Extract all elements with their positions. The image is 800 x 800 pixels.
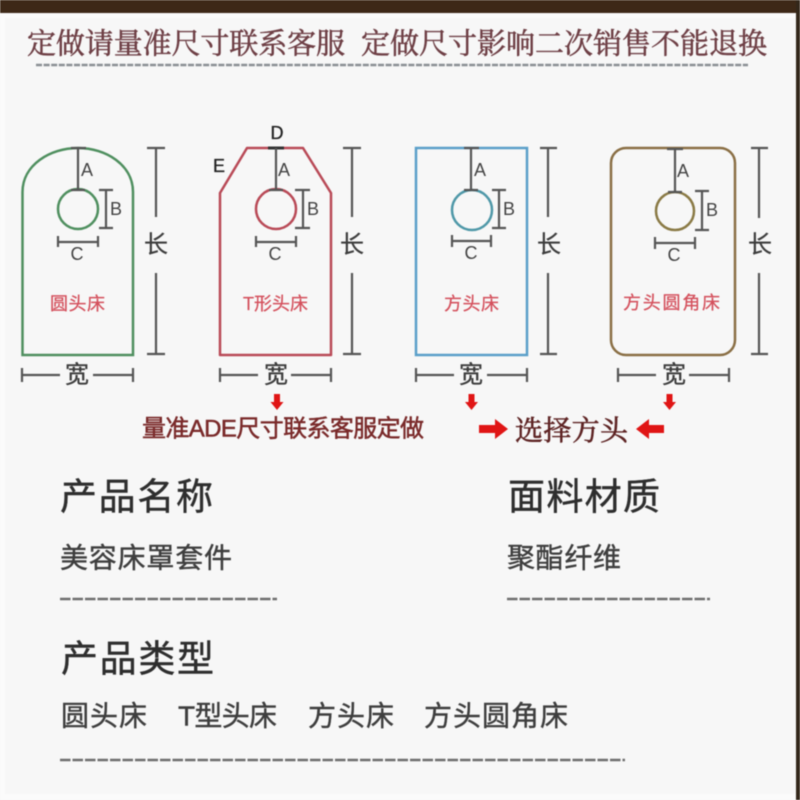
value: material: 聚酯纤维 [507, 542, 621, 574]
arrow: down under square bed [465, 394, 478, 410]
bed outline: T shape [220, 148, 331, 355]
bed label: T形头床 [243, 294, 308, 314]
dimension A: A [278, 160, 290, 180]
width dimension [618, 362, 729, 388]
value: product name: 美容床罩套件 [60, 542, 232, 574]
dimension A: A [474, 160, 486, 180]
value: product types: T型头床 [178, 700, 277, 732]
diagram: square head rounded corner bed [611, 148, 772, 388]
diagram: square head bed [416, 148, 561, 388]
length dimension: 长 [537, 232, 561, 258]
length dimension [748, 148, 772, 354]
dimension A: A [81, 160, 93, 180]
bed label: 方头床 [444, 294, 499, 314]
value: product types [61, 700, 568, 732]
length dimension [144, 148, 168, 354]
dimension D: D [270, 123, 284, 143]
dimension B [695, 191, 718, 230]
dimension B: B [706, 200, 718, 220]
hole circle [656, 192, 694, 230]
length dimension [340, 148, 364, 354]
dimension D [268, 123, 284, 148]
dimension B: B [503, 199, 515, 219]
bed outline: square [416, 148, 527, 355]
length dimension: 长 [340, 232, 364, 258]
hole circle [256, 189, 296, 229]
diagram: T-shaped head bed [213, 123, 364, 388]
dimension A [71, 148, 93, 190]
width dimension: 宽 [264, 362, 288, 388]
bed outline: rounded rectangle [611, 148, 735, 355]
arrow: left to choice [636, 419, 664, 439]
dimension B [492, 190, 515, 228]
dimension A [464, 148, 486, 190]
hole circle [58, 189, 98, 229]
heading: material: 面料材质 [508, 476, 660, 518]
dimension A [667, 149, 689, 192]
dimension C: C [70, 244, 84, 264]
heading: product name: 产品名称 [60, 476, 213, 518]
length dimension [537, 148, 561, 354]
width dimension [22, 362, 133, 388]
note: measure ADE: 量准ADE尺寸联系客服定做 [142, 416, 424, 442]
arrow: down under T bed [270, 394, 284, 410]
value: product types: 圆头床 [61, 700, 147, 732]
arrow: right to choice [479, 419, 508, 439]
dimension B [99, 190, 122, 228]
right dark border [796, 0, 800, 800]
arrow: down under rounded bed [663, 394, 676, 410]
dimension C: C [668, 245, 680, 265]
notice title [27, 22, 767, 62]
dimension E: E [213, 156, 225, 176]
bed label: 方头圆角床 [623, 293, 720, 313]
dimension C: C [464, 243, 478, 263]
hole circle [452, 190, 492, 230]
dimension B [295, 190, 319, 228]
length dimension: 长 [748, 232, 772, 258]
note: choose square head: 选择方头 [515, 409, 629, 449]
top dark border [0, 0, 800, 13]
notice title: 定做尺寸影响二次销售不能退换 [361, 22, 767, 62]
bed label: 圆头床 [50, 294, 105, 314]
dimension B: B [307, 199, 319, 219]
length dimension: 长 [144, 232, 168, 258]
dimension C [452, 235, 491, 263]
bed outline: round head [22, 148, 133, 355]
width dimension: 宽 [65, 362, 89, 388]
title dashed divider [36, 64, 748, 66]
dimension C: C [268, 244, 282, 264]
diagram: round head bed [22, 148, 168, 388]
dimension A [269, 148, 290, 190]
notice title: 定做请量准尺寸联系客服 [27, 22, 345, 62]
width dimension: 宽 [662, 362, 686, 388]
width dimension [220, 362, 331, 388]
value: product types: 方头床 [308, 700, 394, 732]
width dimension: 宽 [459, 362, 483, 388]
dimension A: A [677, 161, 689, 181]
dimension C [58, 236, 98, 264]
dimension B: B [110, 199, 122, 219]
dimension C [256, 236, 296, 264]
value: product types: 方头圆角床 [424, 700, 568, 732]
width dimension [416, 362, 527, 388]
dimension C [655, 237, 695, 265]
heading: product type: 产品类型 [61, 638, 214, 680]
